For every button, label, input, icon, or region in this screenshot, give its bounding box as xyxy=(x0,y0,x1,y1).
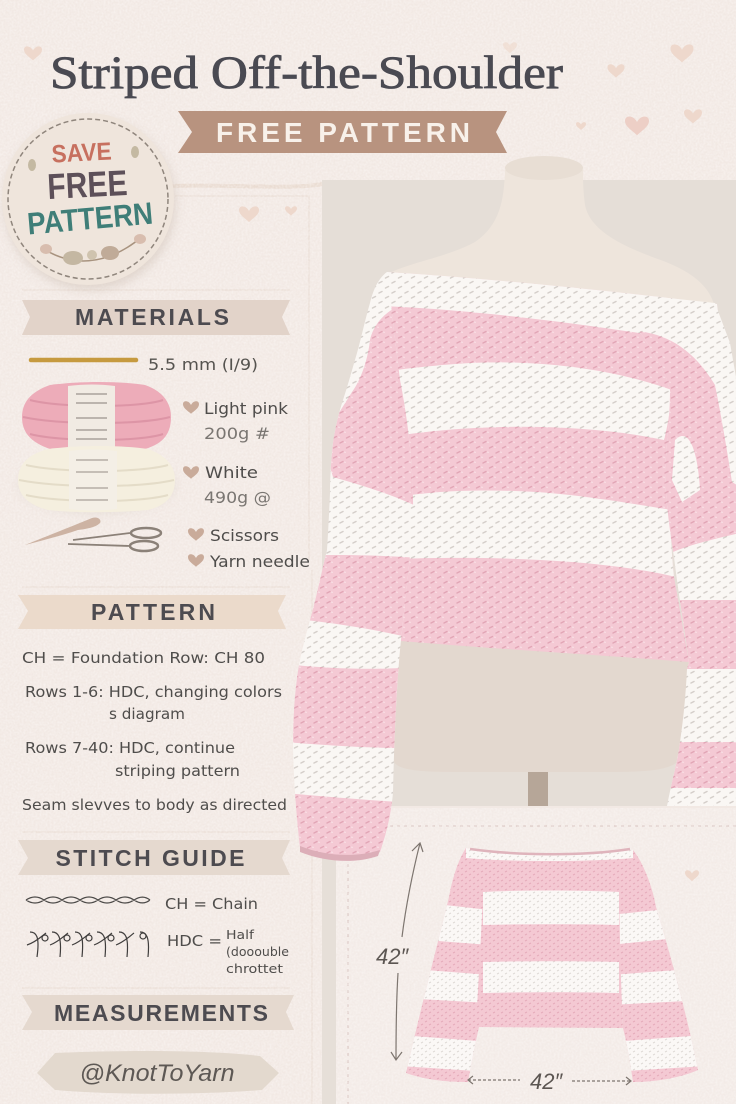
icons: material hearts xyxy=(183,401,204,567)
ribbon: pattern: PATTERN xyxy=(91,599,215,625)
icon: white yarn xyxy=(18,446,175,513)
panel: left column xyxy=(0,182,336,1104)
paper texture bottom panel xyxy=(336,808,736,1104)
hdc label: (dooouble xyxy=(226,944,289,959)
hdc label: chrottet xyxy=(226,961,283,976)
badge: save free pattern: SAVE xyxy=(51,137,112,169)
pattern instructions: Rows 1-6: HDC, changing colors xyxy=(25,683,282,701)
sleeve cuff shadow xyxy=(300,846,380,861)
pattern instructions: Rows 7-40: HDC, continue xyxy=(25,739,235,757)
mannequin stand pole xyxy=(528,772,548,806)
paper texture xyxy=(0,0,736,180)
mannequin lower torso xyxy=(389,640,690,772)
ribbon: pattern xyxy=(18,595,286,629)
ribbon: measurements xyxy=(22,995,294,1030)
floral garland xyxy=(28,146,146,265)
ribbon: measurements: MEASUREMENTS xyxy=(54,1000,268,1026)
pattern instructions xyxy=(22,649,287,814)
pattern instructions: Seam slevves to body as directed xyxy=(22,796,287,814)
pattern instructions: striping pattern xyxy=(115,762,240,780)
ribbon: materials xyxy=(22,300,290,335)
width label: 42″ xyxy=(530,1069,563,1094)
badge: save free pattern: FREE xyxy=(46,162,128,207)
icon: needle and scissors xyxy=(25,517,161,551)
paper texture left column xyxy=(0,180,322,1104)
icon: pink yarn xyxy=(22,382,171,451)
pattern instructions: CH = Foundation Row: CH 80 xyxy=(22,649,265,667)
width measurement arrow xyxy=(468,1076,631,1085)
hdc label: Half xyxy=(226,927,255,942)
hdc label xyxy=(167,927,289,976)
pattern instructions: s diagram xyxy=(109,705,185,723)
main sweater: right sleeve xyxy=(640,298,736,806)
title: Striped Off-the-Shoulder xyxy=(50,47,563,99)
hdc label: HDC = xyxy=(167,932,222,950)
chain label: CH = Chain xyxy=(165,895,258,913)
handle tag xyxy=(37,1051,279,1094)
material list: 490g @ xyxy=(204,488,271,507)
material list xyxy=(204,399,310,571)
hook size text: 5.5 mm (I/9) xyxy=(148,355,258,374)
icon: crochet hook xyxy=(31,358,136,362)
main sweater: body xyxy=(380,265,730,665)
flat sweater: body xyxy=(466,848,633,1028)
panel: mannequin photo xyxy=(322,180,736,806)
material list: White xyxy=(205,463,258,482)
decorative hearts xyxy=(24,42,702,881)
panel: bottom flat sweater xyxy=(336,808,736,1104)
flat sweater neckline xyxy=(470,849,630,854)
ribbon: materials: MATERIALS xyxy=(75,304,229,330)
height measurement arrow xyxy=(391,843,423,1060)
flat sweater: right sleeve xyxy=(619,850,698,1082)
main sweater: left sleeve xyxy=(293,272,413,855)
ribbon: stitch guide: STITCH GUIDE xyxy=(56,845,244,871)
icon: hdc stitch xyxy=(27,932,149,957)
ribbon: free pattern: FREE PATTERN xyxy=(216,117,470,148)
material list: Yarn needle xyxy=(209,552,310,571)
ribbon: stitch guide xyxy=(18,840,290,875)
ribbon: free pattern xyxy=(178,111,507,153)
material list: 200g # xyxy=(204,424,270,443)
height label: 42″ xyxy=(376,944,409,969)
icon: chain stitch xyxy=(26,897,150,903)
flat sweater: left sleeve xyxy=(406,848,483,1082)
badge: save free pattern: PATTERN xyxy=(26,196,154,241)
material list: Scissors xyxy=(210,526,279,545)
material list: Light pink xyxy=(204,399,289,418)
badge: save free pattern xyxy=(2,113,176,290)
mannequin neck and shoulders xyxy=(385,156,715,308)
handle tag: @KnotToYarn xyxy=(80,1060,234,1087)
